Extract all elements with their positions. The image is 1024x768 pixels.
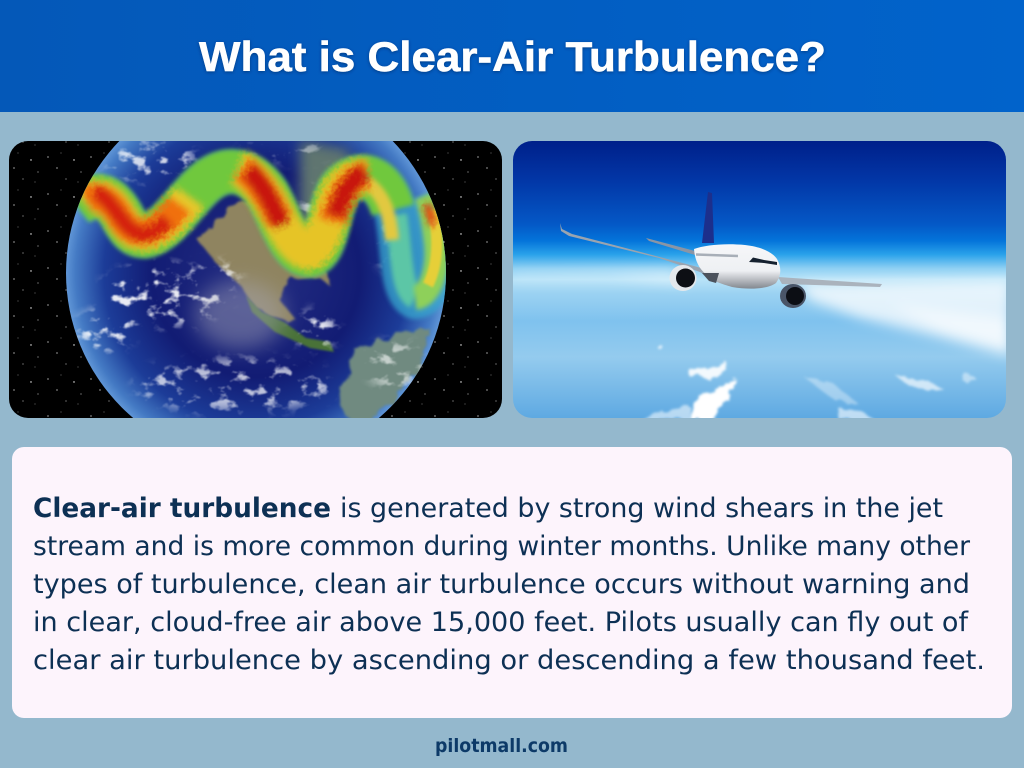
paragraph: is generated by strong wind shears in the jet: [340, 493, 943, 524]
paragraph: Clear-air turbulence: [33, 493, 331, 524]
jet stream band: [76, 168, 437, 298]
land: North America: [198, 190, 332, 322]
left engine: [670, 265, 696, 291]
fuselage: [694, 244, 780, 289]
paragraph: types of turbulence, clean air turbulence occurs without warning and: [33, 569, 970, 600]
right wing: [778, 277, 882, 287]
paragraph: in clear, cloud-free air above 15,000 feet. Pilots usually can fly out of: [33, 607, 969, 638]
title: What is Clear-Air Turbulence?: [199, 33, 826, 80]
header banner: [0, 0, 1024, 112]
cabin windows: [696, 253, 738, 257]
land: South America: [340, 328, 430, 430]
text panel: [12, 447, 1012, 718]
photo: Earth with jet stream: [9, 141, 502, 418]
right engine: [780, 284, 806, 308]
tail fin: [702, 192, 714, 243]
paragraph: stream and is more common during winter months. Unlike many other: [33, 531, 971, 562]
paragraph: clear air turbulence by ascending or descending a few thousand feet.: [33, 645, 985, 676]
small clouds: [640, 345, 975, 420]
left wing: [560, 223, 704, 274]
paragraph: [33, 493, 985, 676]
cockpit windows: [749, 258, 777, 265]
clouds: [74, 141, 426, 418]
photo: airliner in the sky: [513, 141, 1010, 420]
footer: website: pilotmall.com: [435, 735, 568, 757]
far stabilizer: [646, 238, 695, 255]
cloud bands: [513, 270, 1010, 356]
airplane: [560, 192, 882, 308]
